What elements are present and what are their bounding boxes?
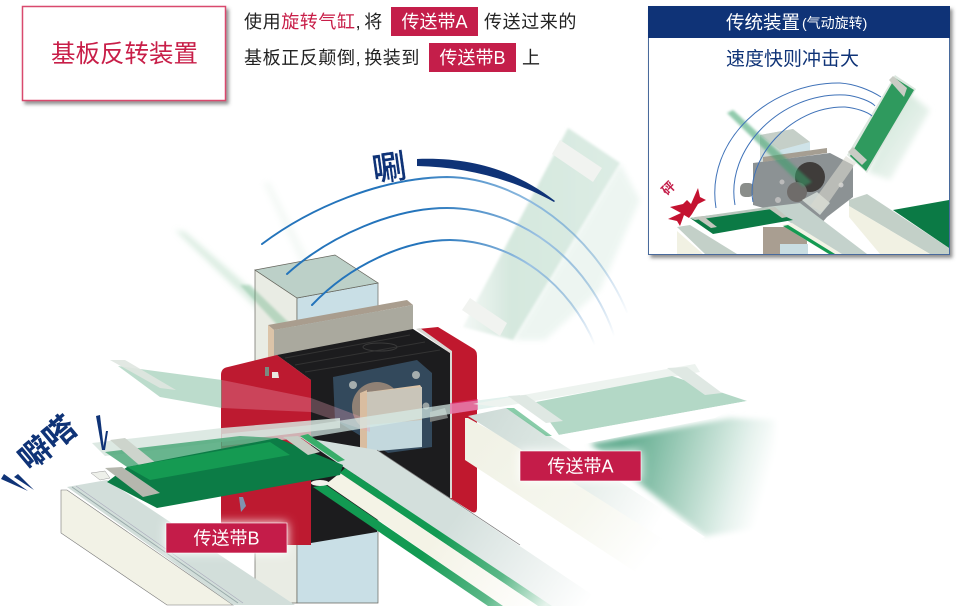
column ghost streak: [240, 285, 327, 360]
inset arcs: [715, 83, 881, 208]
sound word: whoosh: 唰: [370, 148, 409, 190]
rotary cylinder body: [221, 327, 477, 545]
left red housing: [221, 355, 311, 545]
shaft: [430, 408, 448, 422]
sound word: click: 噼嗒: [11, 409, 84, 477]
label: conveyor A: 传送带A: [547, 456, 614, 476]
main illustration: [1, 128, 775, 606]
inset lower board: [690, 207, 793, 234]
red label B backing strip under board: [239, 497, 246, 512]
inset motion ghost: [727, 110, 812, 187]
support column: [255, 255, 378, 603]
ghost board upper right: [462, 128, 640, 340]
impact ticks left: [1, 474, 34, 491]
description text: [244, 7, 577, 72]
label: conveyor B: 传送带B: [193, 528, 260, 548]
label: conveyor B: [166, 523, 287, 553]
description text: 传送带B: [439, 48, 506, 68]
left rail: [61, 480, 295, 605]
inset rotated board: [847, 75, 930, 180]
title box: [22, 6, 226, 100]
description text: 传送过来的: [484, 12, 577, 32]
description text: 上: [522, 48, 540, 68]
top slots on body: [285, 335, 440, 372]
inset left rail: [677, 225, 737, 254]
conveyor B ghost board: [92, 418, 340, 470]
translucent cover plate: [333, 360, 432, 453]
sensor marks: [272, 372, 279, 378]
panel: traditional device inset: [648, 6, 950, 254]
inset right rail: [849, 194, 949, 254]
inset header: 传统装置: [726, 12, 800, 33]
right red housing: [418, 327, 477, 512]
description text: 传送带A: [401, 12, 468, 32]
inset center rail: [767, 203, 867, 254]
rail A: [465, 408, 705, 575]
label: conveyor A: [520, 451, 641, 481]
impact ticks right: [96, 415, 108, 450]
inset impact burst: [668, 188, 706, 226]
center rail: [300, 437, 600, 606]
motion swoosh: [417, 159, 555, 202]
inset illustration: [659, 75, 949, 254]
rotating block: [360, 390, 367, 452]
ghost board A: [473, 364, 747, 447]
ghost board left upper: [110, 360, 370, 432]
description text: 基板正反颠倒,换装到: [244, 48, 420, 68]
inset subtitle: 速度快则冲击大: [726, 48, 859, 70]
title box: 基板反转装置: [51, 40, 198, 68]
speed arcs: [262, 177, 627, 345]
inset header: [648, 6, 950, 38]
green belt behind rail A: [590, 418, 775, 536]
ghost light strip through body: [222, 395, 520, 446]
inset header: (气动旋转): [802, 15, 867, 31]
conveyor B board: [91, 434, 345, 508]
description text: 使用旋转气缸,将: [244, 11, 383, 32]
tan mounting plate: [268, 300, 413, 365]
ghost streak upper left: [175, 182, 345, 345]
inset impact word: 砰: [659, 178, 678, 198]
